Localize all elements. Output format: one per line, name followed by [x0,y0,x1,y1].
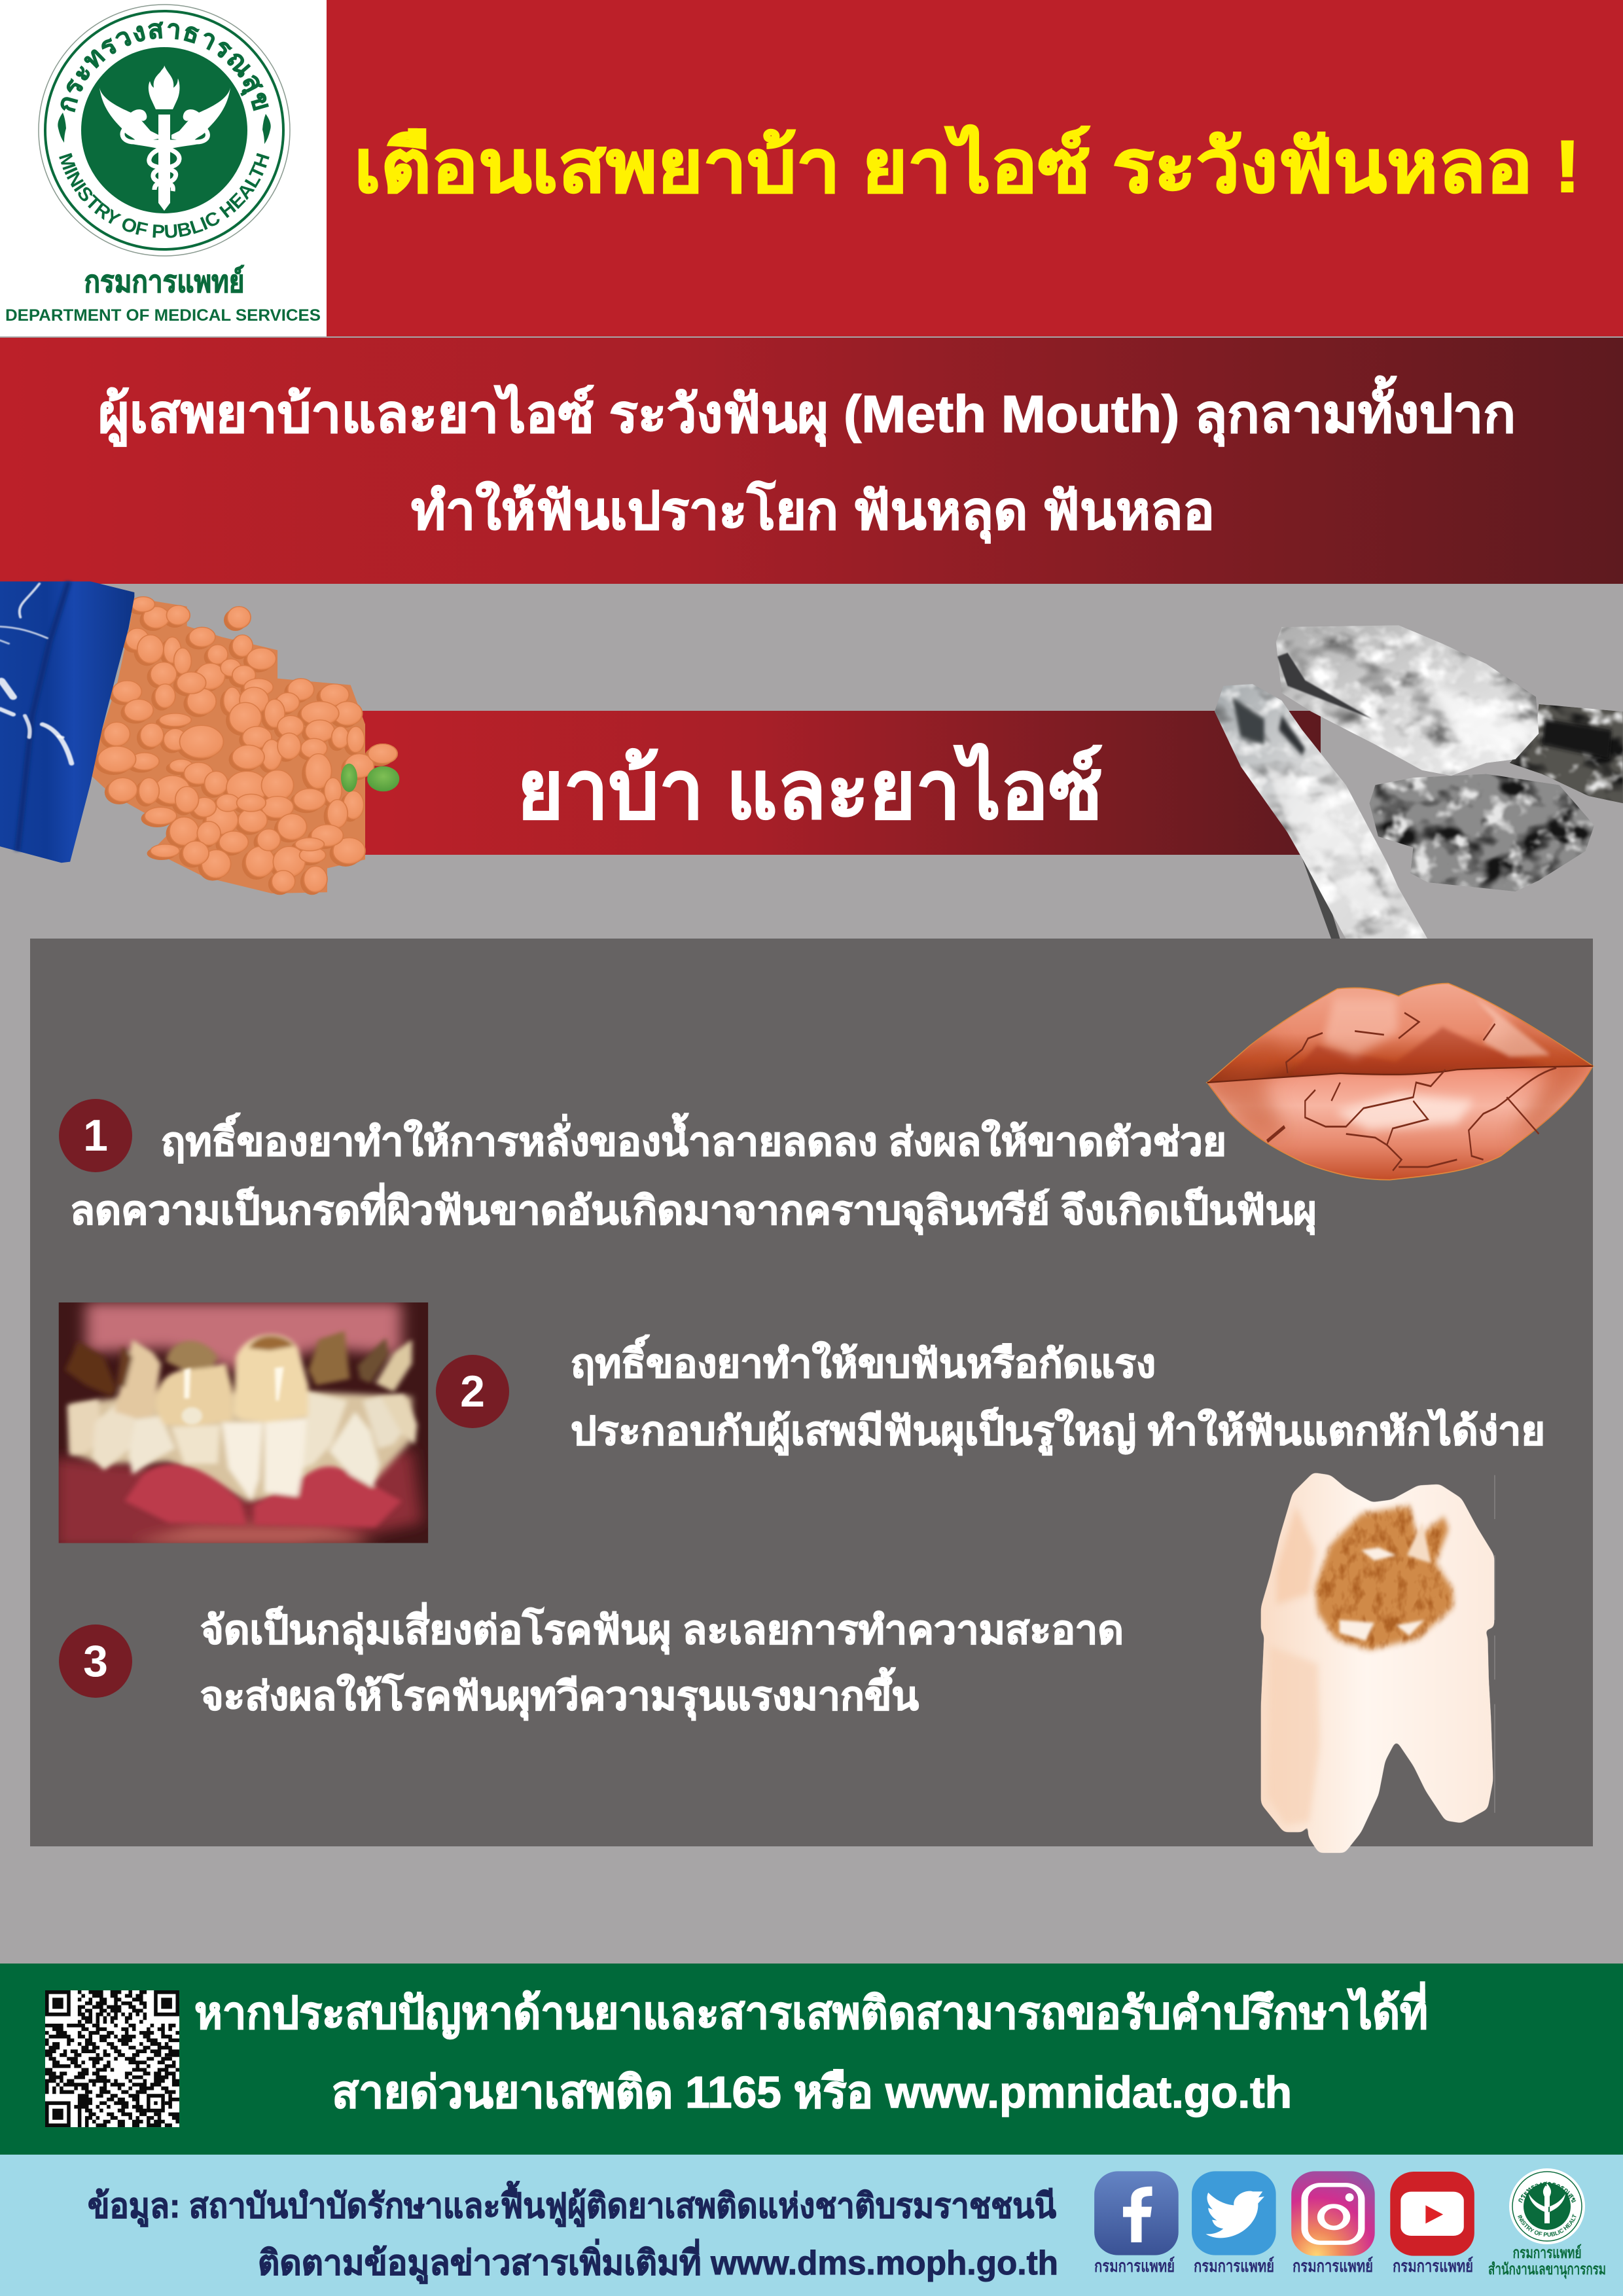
item 3: number badge [59,1624,132,1698]
item 2: text: ฤทธิ์ของยาทำให้ขบฟันหรือกัดแรง [571,1335,1156,1386]
social account labels: กรมการแพทย์ [1194,2256,1274,2276]
item 1: number badge [59,1099,132,1172]
header logo panel: MINISTRY OF PUBLIC HEALTH [59,153,270,238]
header logo panel: กระทรวงสาธารณสุข [60,21,269,113]
item 1: text [70,1113,1317,1235]
social account labels: กรมการแพทย์ [1293,2256,1373,2276]
english department name: DEPARTMENT OF MEDICAL SERVICES [5,306,321,325]
header logo panel [0,0,327,336]
icon: facebook [1094,2171,1179,2255]
item 2: number badge [436,1355,509,1428]
subtitle band [0,338,1623,584]
item 1: number badge: 1 [83,1111,108,1160]
subtitle line 1: ผู้เสพยาบ้าและยาไอซ์ ระวังฟันผุ (Meth Mouth) ลุกลามทั้งปาก [98,376,1516,447]
item 1: text: ลดความเป็นกรดที่ผิวฟันขาดอันเกิดมาจากคราบจุลินทรีย์ จึงเกิดเป็นฟันผุ [70,1183,1317,1235]
helpline text line 2: สายด่วนยาเสพติด 1165 หรือ www.pmnidat.go.th [332,2068,1292,2117]
QR code [45,1990,179,2127]
follow text: ติดตามข้อมูลข่าวสารเพิ่มเติมที่ www.dms.moph.go.th [258,2239,1058,2284]
image: spilled orange pills and blue bag [0,581,399,895]
icon: instagram [1291,2171,1375,2256]
footer: green helpline band [0,1964,1623,2155]
helpline text line 1: หากประสบปัญหาด้านยาและสารเสพติดสามารถขอรับคำปรึกษาได้ที่ [194,1981,1428,2039]
blue bag [0,581,134,863]
item 2: number badge: 2 [460,1367,485,1416]
item 1: text: ฤทธิ์ของยาทำให้การหลั่งของน้ำลายลดลง ส่งผลให้ขาดตัวช่วย [161,1113,1226,1164]
subtitle line 2: ทำให้ฟันเปราะโยก ฟันหลุด ฟันหลอ [411,480,1215,544]
title banner [327,0,1623,336]
image: ice crystals [1215,625,1623,939]
social account labels: กรมการแพทย์ [1094,2256,1175,2276]
icon: youtube [1390,2172,1474,2256]
small ministry logo: กระทรวงสาธารณสุข [1518,2181,1576,2203]
social account labels [1094,2256,1473,2276]
item 2: text [571,1335,1545,1456]
thai department name: กรมการแพทย์ [84,264,245,298]
title text: เตือนเสพยาบ้า ยาไอซ์ ระวังฟันหลอ ! [354,125,1580,207]
small logo caption: กรมการแพทย์ [1513,2244,1581,2262]
social account labels: กรมการแพทย์ [1393,2256,1473,2276]
item 3: text: จะส่งผลให้โรคฟันผุทวีความรุนแรงมากขึ้น [200,1667,919,1721]
panel: effects [30,939,1597,1846]
source text: ข้อมูล: สถาบันบำบัดรักษาและฟื้นฟูผู้ติดยาเสพติดแห่งชาติบรมราชชนนี [88,2181,1056,2227]
small ministry logo: MINISTRY OF PUBLIC HEALTH [1518,2214,1577,2237]
item 3: text [200,1602,1124,1721]
icon: twitter [1192,2171,1276,2255]
image: cracked lips [1194,983,1597,1180]
item 2: text: ประกอบกับผู้เสพมีฟันผุเป็นรูใหญ่ ทำให้ฟันแตกหักได้ง่าย [571,1407,1545,1456]
item 3: text: จัดเป็นกลุ่มเสี่ยงต่อโรคฟันผุ ละเลยการทำความสะอาด [200,1602,1124,1655]
ribbon text: ยาบ้า และยาไอซ์ [517,744,1103,836]
image: decayed tooth [1261,1473,1495,1853]
image: meth mouth teeth photo [55,1302,428,1549]
small logo caption [1488,2244,1606,2280]
item 3: number badge: 3 [83,1636,108,1686]
ribbon: section heading [340,711,1321,855]
